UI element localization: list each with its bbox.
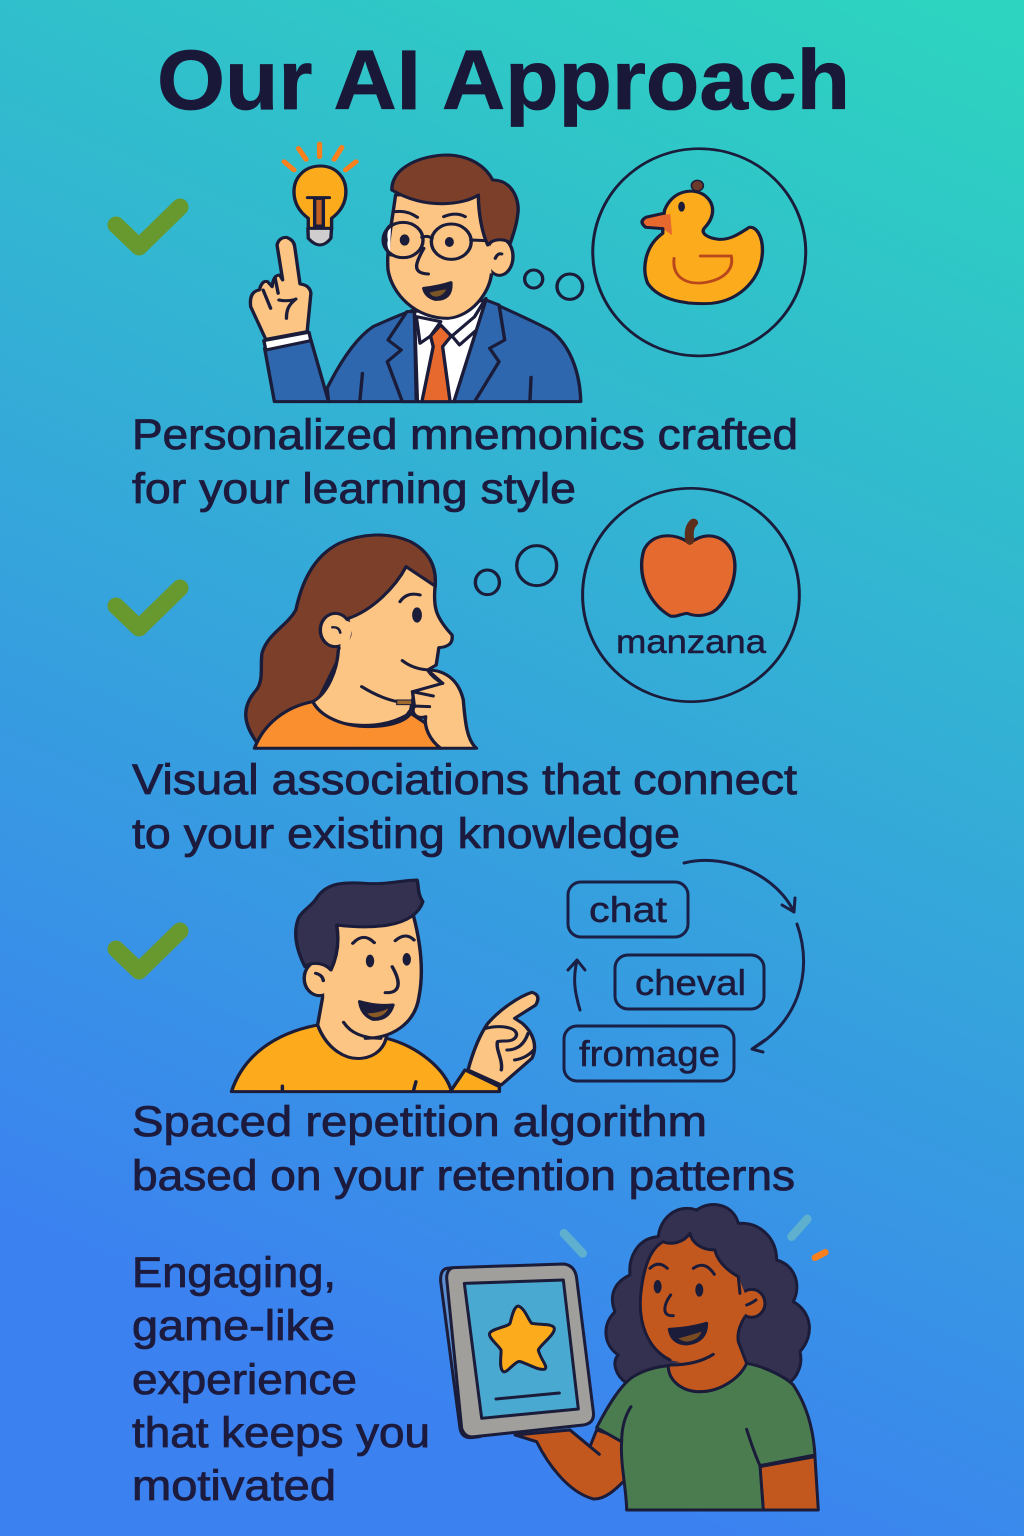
title: Our AI Approach xyxy=(157,33,850,127)
thought bubbles xyxy=(475,546,557,595)
text: game-like experience: Engaging, xyxy=(132,1250,336,1297)
figure: woman xyxy=(515,1205,818,1510)
arrow: repetition cycle top xyxy=(684,860,795,912)
flashcard: fromage: fromage xyxy=(579,1033,720,1074)
text: game-like experience: experience xyxy=(132,1357,357,1404)
thought circle with duck xyxy=(593,149,806,356)
flashcard: chat xyxy=(568,882,688,937)
icon: green check 2 xyxy=(116,588,180,628)
icon: green check 1 xyxy=(116,207,180,247)
icon: tablet with star xyxy=(441,1264,594,1438)
text: spaced repetition: Spaced repetition algorithm xyxy=(132,1099,707,1146)
flashcard: chat: chat xyxy=(589,889,667,930)
illustration: man with light bulb and duck thought xyxy=(250,144,806,402)
text: visual associations: Visual associations that connect xyxy=(132,757,797,804)
icon: light bulb xyxy=(284,144,356,245)
flashcard: cheval: cheval xyxy=(635,962,746,1003)
thought bubbles xyxy=(525,270,583,299)
figure: thinking woman xyxy=(246,535,476,748)
illustration: woman with tablet xyxy=(441,1205,825,1510)
arrow: repetition cycle right xyxy=(752,924,804,1052)
text: personalized mnemonics: for your learning style xyxy=(132,466,576,513)
text: spaced repetition: based on your retention patterns xyxy=(132,1153,795,1200)
illustration: woman thinking of apple xyxy=(246,488,799,748)
text: game-like experience: motivated xyxy=(132,1463,336,1510)
sparkle marks xyxy=(564,1219,825,1258)
text: game-like experience: that keeps you xyxy=(132,1410,430,1457)
text: visual associations: to your existing knowledge xyxy=(132,811,680,858)
panel: spaced repetition xyxy=(116,860,804,1200)
flashcard: cheval xyxy=(615,955,764,1009)
panel: personalized mnemonics xyxy=(116,144,806,513)
icon: green check 3 xyxy=(116,931,180,971)
text: game-like experience: game-like xyxy=(132,1303,335,1350)
panel: visual associations xyxy=(116,488,799,858)
label: manzana: manzana xyxy=(616,623,767,660)
panel: game-like experience xyxy=(132,1205,825,1510)
figure: man in suit xyxy=(250,155,581,402)
illustration: pointing man xyxy=(231,880,538,1092)
arrow: repetition cycle up xyxy=(568,960,585,1010)
text: personalized mnemonics: Personalized mnemonics crafted xyxy=(132,412,798,459)
thought circle with apple xyxy=(583,488,799,702)
flashcard: fromage xyxy=(564,1026,734,1081)
